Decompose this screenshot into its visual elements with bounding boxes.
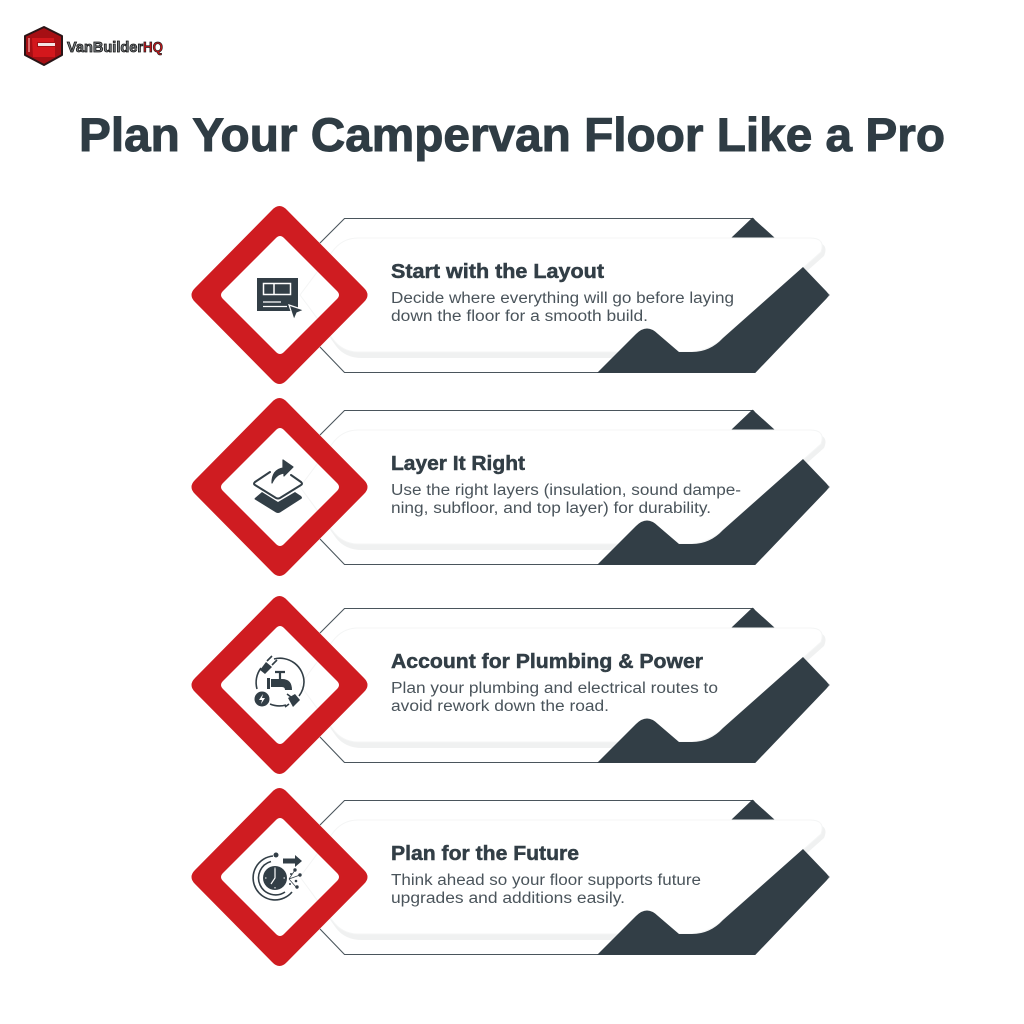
description: Use the right layers (insulation, sound dampe- [391, 482, 741, 499]
icon: layers with arrow [254, 460, 302, 513]
description: upgrades and additions easily. [391, 890, 625, 907]
red diamond frame [192, 398, 368, 576]
heading: Account for Plumbing & Power [391, 650, 703, 673]
logo text HQ: HQ [143, 39, 163, 56]
icon: layout with cursor [257, 278, 304, 320]
red diamond frame [192, 206, 368, 384]
description: down the floor for a smooth build. [391, 308, 648, 325]
description: Plan your plumbing and electrical routes to [391, 680, 718, 697]
card shape [300, 218, 829, 373]
panel: layer it right [192, 398, 829, 576]
card shape [300, 410, 829, 565]
description: ning, subfloor, and top layer) for durability. [391, 500, 711, 517]
card shape [300, 608, 829, 763]
icon: clock with arrow [253, 852, 302, 900]
red diamond frame [192, 788, 368, 966]
description: Decide where everything will go before laying [391, 290, 734, 307]
description [391, 680, 718, 715]
description: avoid rework down the road. [391, 698, 609, 715]
heading: Plan for the Future [391, 842, 579, 865]
icon: tap, plugs and bolt [254, 656, 304, 707]
panel: start with the layout [192, 206, 829, 384]
heading: Start with the Layout [391, 260, 604, 283]
title: Plan Your Campervan Floor Like a Pro [79, 108, 945, 161]
description [391, 872, 701, 907]
description [391, 482, 741, 517]
heading: Layer It Right [391, 452, 525, 475]
panel: account for plumbing and power [192, 596, 829, 774]
icon: red van hexagon [25, 27, 62, 65]
red diamond frame [192, 596, 368, 774]
logo [25, 27, 163, 65]
description: Think ahead so your floor supports future [391, 872, 701, 889]
description [391, 290, 734, 325]
logo text: VanBuilder [67, 39, 143, 56]
panel: plan for the future [192, 788, 829, 966]
card shape [300, 800, 829, 955]
